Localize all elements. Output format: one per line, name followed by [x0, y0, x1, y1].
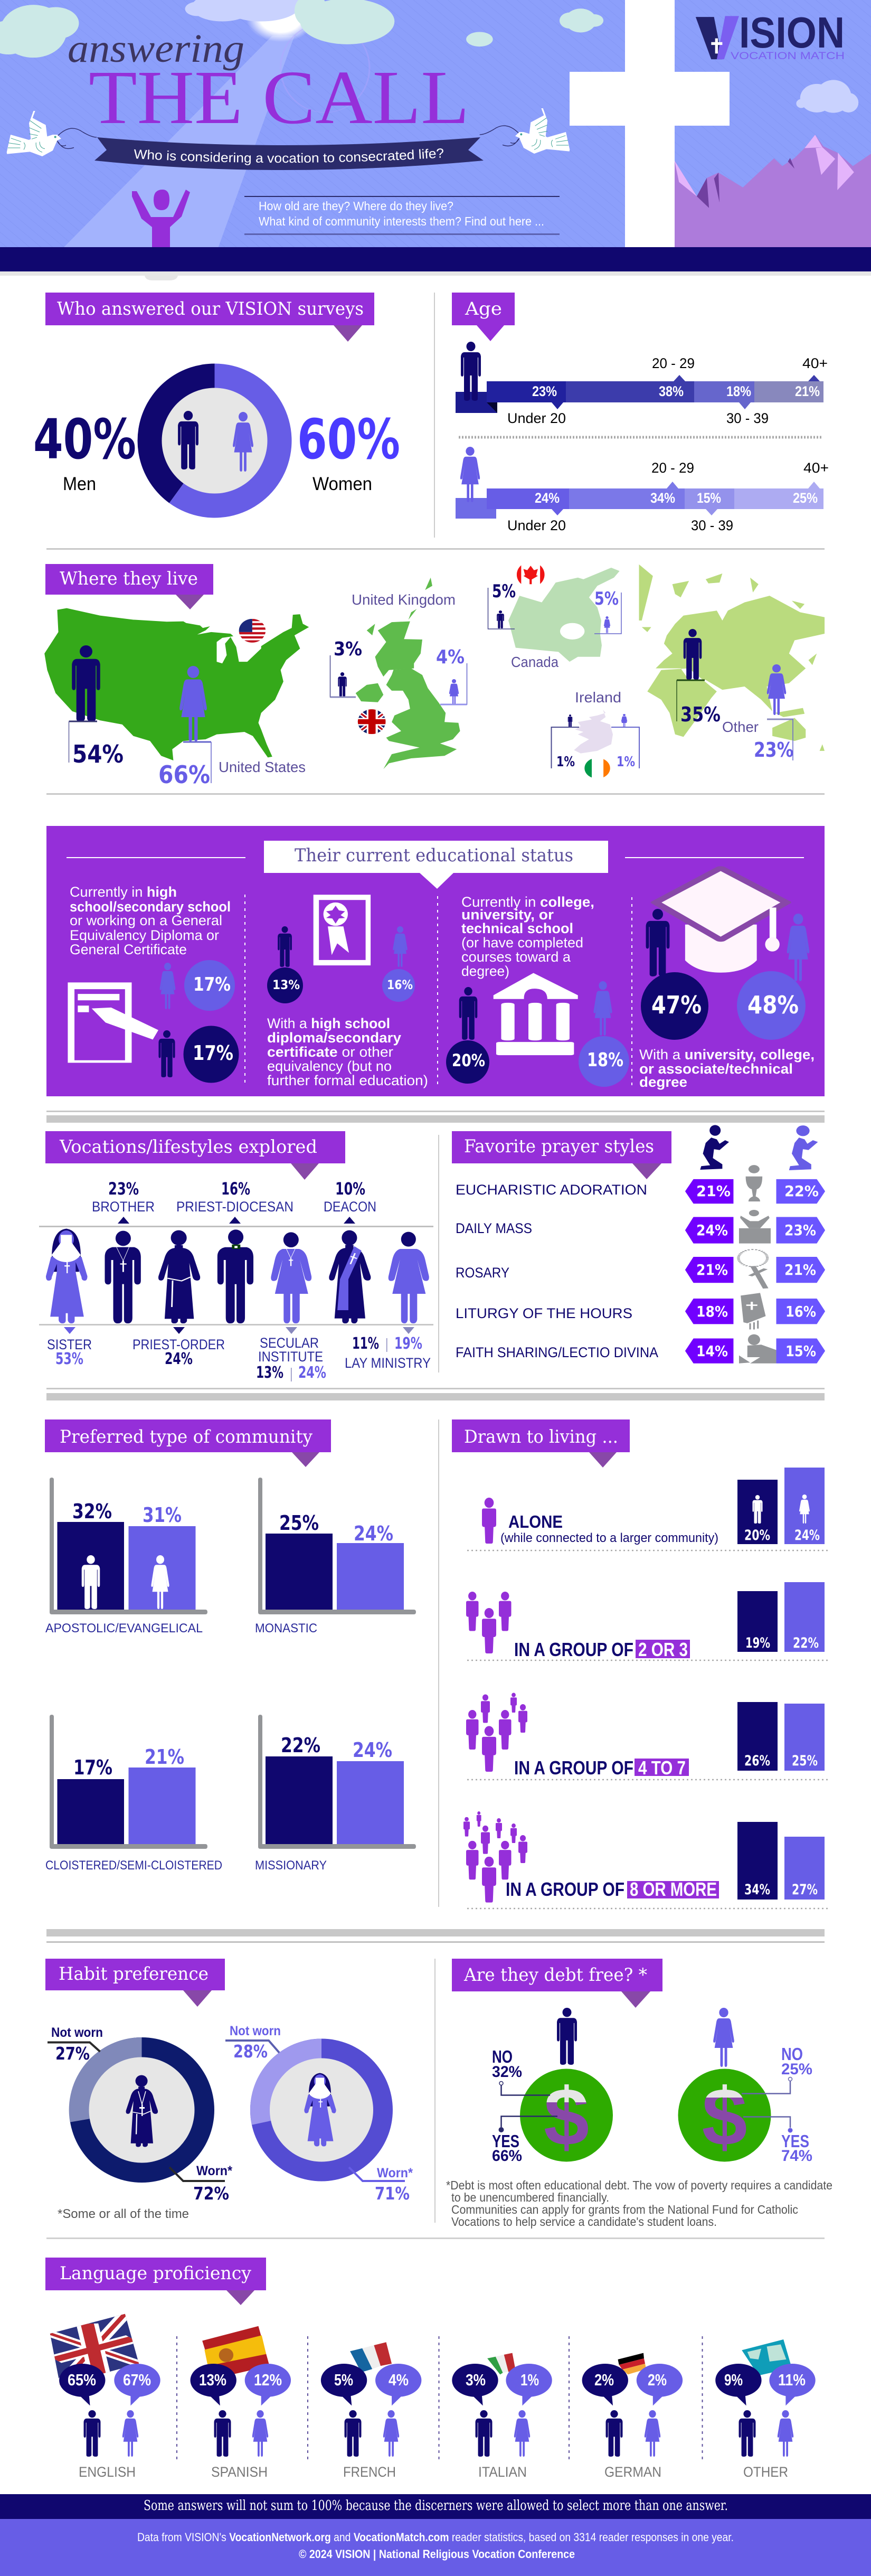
language labels: OTHER — [743, 2464, 788, 2480]
bar chart: apostolic: 31% — [143, 1503, 182, 1527]
logo: VOCATION MATCH — [731, 51, 845, 62]
row: alone — [482, 1468, 825, 1545]
footnote: debt: *Debt is most often educational debt. The vow of poverty requires a candidate — [446, 2178, 832, 2192]
column: diploma: certificate or other — [267, 1044, 393, 1060]
map: rest of world: 23% — [754, 738, 793, 761]
chart: men debt: YES — [492, 2131, 519, 2151]
row: group of 2 or 3: IN A GROUP OF — [514, 1639, 633, 1660]
light beam and sun — [64, 0, 370, 247]
chart: women debt: YES — [781, 2131, 809, 2151]
prayer style table: 18% — [696, 1303, 728, 1320]
heading: debt free: Are they debt free? * — [463, 1964, 647, 1986]
bar chart: apostolic — [45, 1478, 207, 1635]
label: sister, priest-order, secular, lay ministry — [47, 1327, 431, 1382]
heading: debt free — [452, 1959, 662, 2008]
map: United Kingdom: United Kingdom — [352, 591, 456, 608]
language chart: 1% — [520, 2371, 539, 2389]
column: college: courses toward a — [461, 949, 571, 965]
clouds — [0, 0, 858, 113]
bar chart: monastic — [255, 1478, 416, 1635]
label: brother, priest-diocesan, deacon: 23% — [108, 1179, 139, 1199]
label: brother, priest-diocesan, deacon: 16% — [221, 1179, 250, 1199]
column: diploma: equivalency (but no — [267, 1058, 392, 1074]
language chart: 2% — [594, 2371, 614, 2389]
row: group of 8 or more: 8 OR MORE — [630, 1878, 717, 1900]
row: group of 4 to 7: 25% — [792, 1753, 818, 1769]
row: group of 8 or more: 34% — [744, 1882, 770, 1898]
donut chart: men habit: 27% — [55, 2043, 90, 2064]
prayer style table — [456, 1125, 825, 1364]
chart: women debt — [678, 2008, 812, 2165]
map: United States: 66% — [158, 760, 210, 789]
bar chart: missionary: MISSIONARY — [255, 1858, 327, 1873]
heading: who answered: Who answered our VISION surveys — [57, 298, 364, 319]
donut chart: women habit: 71% — [375, 2183, 410, 2204]
label: brother, priest-diocesan, deacon: DEACON — [324, 1199, 376, 1215]
icon: kneeling figures — [700, 1125, 818, 1170]
footer: © 2024 VISION | National Religious Vocation Conference — [299, 2547, 575, 2561]
map: Ireland — [551, 689, 639, 779]
prayer style table: DAILY MASS — [456, 1220, 532, 1236]
donut chart: women habit: 28% — [233, 2041, 268, 2062]
heading: language proficiency: Language proficiency — [60, 2263, 252, 2284]
label: brother, priest-diocesan, deacon — [92, 1179, 376, 1224]
prayer style table: ROSARY — [456, 1265, 509, 1281]
language labels: ENGLISH — [79, 2464, 136, 2480]
row: group of 8 or more — [463, 1811, 825, 1903]
map: rest of world: 35% — [680, 703, 721, 726]
column: high school: 17% — [193, 1041, 233, 1065]
language labels: SPANISH — [211, 2464, 268, 2480]
bar chart: monastic: MONASTIC — [255, 1621, 317, 1635]
column: diploma: 13% — [272, 977, 300, 992]
map: United Kingdom: 4% — [436, 646, 465, 668]
footer — [0, 2494, 871, 2576]
chart: men debt: 66% — [492, 2147, 522, 2165]
label: brother, priest-diocesan, deacon: PRIEST-DIOCESAN — [176, 1199, 294, 1215]
column: college: 18% — [587, 1049, 623, 1071]
footnote: habit: *Some or all of the time — [58, 2207, 189, 2221]
vocation figures row — [39, 1179, 433, 1382]
bar chart: missionary: 22% — [281, 1734, 320, 1757]
language chart: 9% — [724, 2371, 743, 2389]
row: group of 2 or 3 — [466, 1582, 825, 1660]
language chart — [44, 2312, 816, 2480]
prayer style table: FAITH SHARING/LECTIO DIVINA — [456, 1345, 658, 1360]
men age bar — [456, 342, 828, 426]
heading: who answered — [45, 293, 374, 342]
heading: prayer styles: Favorite prayer styles — [464, 1136, 654, 1157]
map: United Kingdom — [330, 578, 467, 769]
bar chart: apostolic: APOSTOLIC/EVANGELICAL — [45, 1621, 203, 1635]
donut chart: men habit — [48, 2025, 232, 2204]
label: sister, priest-order, secular, lay ministry: 53% — [55, 1350, 83, 1368]
heading: age: Age — [465, 298, 502, 319]
column: college — [446, 894, 629, 1087]
column: college: (or have completed — [461, 935, 583, 951]
column: high school: or working on a General — [70, 913, 222, 928]
language chart: 4% — [389, 2371, 409, 2389]
column: high school: General Certificate — [70, 942, 187, 957]
bar chart: apostolic: 32% — [72, 1500, 112, 1523]
map: Canada: 5% — [492, 581, 516, 602]
prayer style table: 16% — [785, 1303, 816, 1320]
prayer style table: LITURGY OF THE HOURS — [456, 1305, 632, 1321]
map: Ireland: Ireland — [575, 689, 621, 706]
donut chart: men habit: Worn* — [196, 2164, 232, 2178]
women age bar: 15% — [697, 490, 721, 506]
icons: chalice, pulpit, rosary, book, reader — [739, 1165, 776, 1364]
label: brother, priest-diocesan, deacon: 10% — [335, 1179, 365, 1199]
men age bar: 40+ — [802, 355, 828, 371]
logo: ISION — [739, 8, 845, 57]
heading: where they live — [45, 564, 213, 609]
banner ribbon — [94, 137, 484, 170]
language chart: 11% — [778, 2371, 806, 2389]
women age bar: 40+ — [803, 460, 829, 476]
language chart: 2% — [648, 2371, 667, 2389]
people icons — [84, 2410, 793, 2457]
column: high school: Currently in high — [70, 884, 177, 900]
column: diploma: diploma/secondary — [267, 1030, 401, 1046]
map: United States: 54% — [72, 740, 124, 768]
percent hexagons — [685, 1179, 733, 1364]
gender donut chart — [33, 363, 400, 518]
intro text: What kind of community interests them? Find out here ... — [259, 214, 544, 228]
prayer style table: 21% — [696, 1182, 731, 1200]
row: group of 4 to 7: 26% — [744, 1753, 770, 1769]
row: group of 4 to 7: 4 TO 7 — [638, 1757, 686, 1779]
footnote: debt: Vocations to help service a candidate's student loans. — [451, 2215, 717, 2229]
men age bar: 30 - 39 — [726, 410, 769, 426]
banner ribbon: Who is considering a vocation to consecrated life? — [134, 148, 443, 165]
column: college: 20% — [452, 1050, 485, 1070]
column: university — [639, 868, 815, 1090]
heading: vocations: Vocations/lifestyles explored — [59, 1136, 317, 1158]
column: high school — [68, 884, 239, 1083]
map: United States: United States — [219, 759, 306, 775]
bar chart: cloistered: CLOISTERED/SEMI-CLOISTERED — [45, 1858, 222, 1873]
row: group of 4 to 7 — [466, 1693, 825, 1779]
column: college: Currently in college, — [461, 894, 594, 910]
column: college: university, or — [461, 907, 554, 923]
donut chart: men habit: Not worn — [51, 2025, 103, 2040]
footnote: debt: to be unencumbered financially. — [451, 2190, 609, 2204]
heading: where they live: Where they live — [60, 568, 198, 589]
men age bar: 38% — [659, 383, 684, 399]
intro text: How old are they? Where do they live? — [259, 199, 453, 213]
bar chart: cloistered — [45, 1715, 222, 1873]
prayer style table: 15% — [785, 1342, 816, 1360]
column: university: 48% — [747, 991, 799, 1019]
icon: right dove — [480, 108, 570, 154]
label: sister, priest-order, secular, lay ministry: INSTITUTE — [258, 1349, 323, 1365]
language chart: 13% — [199, 2371, 226, 2389]
map: Canada — [488, 562, 621, 670]
bar chart: cloistered: 21% — [145, 1745, 184, 1769]
label: sister, priest-order, secular, lay ministry: 24% — [298, 1364, 326, 1382]
column: university: 47% — [651, 991, 702, 1019]
label: brother, priest-diocesan, deacon: BROTHER — [92, 1199, 155, 1215]
gender donut chart: Women — [313, 474, 372, 494]
language labels — [79, 2464, 788, 2480]
donut chart: women habit: Not worn — [230, 2024, 281, 2038]
heading: educational status — [264, 841, 608, 889]
row: group of 2 or 3: 19% — [745, 1635, 770, 1651]
bar chart: missionary: 24% — [353, 1738, 392, 1762]
map: United Kingdom: 3% — [334, 638, 362, 660]
mountains — [675, 135, 871, 247]
chart: men debt: 32% — [492, 2063, 522, 2081]
gender donut chart: 60% — [297, 407, 400, 472]
label: sister, priest-order, secular, lay ministry: SECULAR — [260, 1335, 319, 1351]
heading: drawn to living: Drawn to living ... — [464, 1426, 618, 1447]
prayer style table: 24% — [696, 1221, 728, 1239]
row: alone: ALONE — [508, 1512, 563, 1531]
prayer style table: 23% — [784, 1221, 816, 1239]
gender donut chart: 40% — [33, 407, 136, 472]
donut chart: men habit: 72% — [193, 2183, 229, 2204]
heading: preferred community: Preferred type of community — [60, 1426, 313, 1447]
column: university: With a university, college, — [639, 1047, 815, 1063]
language labels: ITALIAN — [478, 2464, 527, 2480]
prayer style table: 21% — [784, 1261, 816, 1278]
chart: women debt: $ — [702, 2071, 747, 2163]
column: high school: school/secondary school — [70, 899, 231, 915]
bar chart: cloistered: 17% — [73, 1756, 112, 1779]
women age bar — [456, 447, 829, 533]
row: alone: 24% — [794, 1527, 820, 1544]
language chart: 67% — [123, 2371, 151, 2389]
prayer style table: EUCHARISTIC ADORATION — [456, 1182, 647, 1198]
donut chart: women habit — [225, 2024, 413, 2204]
bar chart: monastic: 24% — [354, 1522, 393, 1545]
logo — [696, 8, 845, 62]
map: Canada: Canada — [511, 654, 558, 670]
column: university: degree — [639, 1074, 687, 1090]
heading: prayer styles — [452, 1131, 671, 1179]
language chart: 65% — [68, 2371, 96, 2389]
chart: women debt: 25% — [781, 2061, 812, 2078]
column: diploma: further formal education) — [267, 1073, 428, 1088]
language chart: 12% — [254, 2371, 282, 2389]
footer: Data from VISION's VocationNetwork.org and VocationMatch.com reader statistics, based on 3314 reader responses in one year. — [137, 2531, 734, 2544]
women age bar: 20 - 29 — [651, 460, 694, 476]
heading: age — [452, 293, 515, 341]
panel: title banner — [0, 0, 871, 280]
label: sister, priest-order, secular, lay ministry: PRIEST-ORDER — [132, 1337, 225, 1352]
heading: vocations — [45, 1131, 345, 1180]
prayer style table: 14% — [696, 1342, 728, 1360]
row: group of 8 or more: IN A GROUP OF — [506, 1878, 624, 1900]
map: Ireland: 1% — [617, 754, 635, 770]
label: sister, priest-order, secular, lay ministry: 19% — [394, 1334, 422, 1353]
column: diploma — [267, 895, 428, 1088]
intro text — [244, 196, 560, 235]
row: group of 4 to 7: IN A GROUP OF — [514, 1757, 633, 1779]
column: college: degree) — [461, 963, 509, 979]
column: college: technical school — [461, 920, 573, 936]
heading: habit preference — [45, 1959, 225, 2007]
bar chart: missionary — [255, 1715, 416, 1873]
row: alone: (while connected to a larger community) — [500, 1531, 718, 1545]
gender donut chart: Men — [63, 474, 96, 494]
map: United States — [44, 608, 309, 789]
men age bar: 18% — [726, 383, 751, 399]
map: rest of world: Other — [722, 719, 759, 735]
men age bar: 20 - 29 — [652, 355, 695, 371]
language labels: FRENCH — [343, 2464, 396, 2480]
women age bar: 24% — [535, 490, 560, 506]
label: sister, priest-order, secular, lay ministry: 13% — [256, 1364, 283, 1382]
heading: drawn to living — [452, 1419, 630, 1468]
label: sister, priest-order, secular, lay ministry: LAY MINISTRY — [345, 1355, 431, 1371]
chart: men debt: NO — [492, 2047, 513, 2066]
chart: women debt: 74% — [781, 2147, 812, 2165]
column: high school: Equivalency Diploma or — [70, 927, 219, 943]
panel: educational status — [46, 826, 825, 1096]
language chart: 5% — [334, 2371, 353, 2389]
title: the call: THE CALL — [89, 55, 469, 140]
row: group of 2 or 3: 2 OR 3 — [638, 1639, 688, 1660]
women age bar: Under 20 — [507, 518, 566, 533]
speech bubbles — [59, 2364, 762, 2405]
bar chart: monastic: 25% — [279, 1511, 319, 1535]
row: group of 8 or more: 27% — [792, 1882, 818, 1898]
men age bar: 23% — [532, 383, 557, 399]
row: alone: 20% — [744, 1527, 770, 1544]
white cross — [570, 0, 730, 247]
map: Ireland: 1% — [556, 754, 575, 770]
label: sister, priest-order, secular, lay ministry: 11% — [352, 1334, 379, 1353]
column: diploma: With a high school — [267, 1016, 390, 1031]
heading: habit preference: Habit preference — [59, 1963, 209, 1985]
column: diploma: 16% — [387, 977, 413, 992]
prayer style table: 21% — [696, 1261, 728, 1278]
icon: flags — [44, 2312, 792, 2387]
footnote: debt: Communities can apply for grants from the National Fund for Catholic — [451, 2203, 798, 2216]
label: sister, priest-order, secular, lay ministry: 24% — [165, 1350, 193, 1368]
language chart: 3% — [466, 2371, 486, 2389]
chart: men debt: $ — [544, 2071, 589, 2163]
row: group of 2 or 3: 22% — [793, 1635, 819, 1651]
men age bar: Under 20 — [507, 410, 566, 426]
heading: preferred community — [45, 1419, 331, 1467]
language labels: GERMAN — [604, 2464, 661, 2480]
map: rest of world — [639, 565, 825, 761]
map: Canada: 5% — [594, 588, 619, 609]
women age bar: 25% — [793, 490, 818, 506]
donut chart: women habit: Worn* — [377, 2166, 413, 2180]
title: answering: answering — [68, 26, 244, 71]
column: university: or associate/technical — [639, 1061, 793, 1077]
icon: left dove — [7, 111, 97, 156]
men age bar: 21% — [795, 383, 820, 399]
prayer style table: 22% — [784, 1182, 819, 1200]
chart: men debt — [492, 2008, 613, 2165]
footer: Some answers will not sum to 100% because the discerners were allowed to select more than one answer. — [144, 2498, 728, 2514]
women age bar: 30 - 39 — [691, 518, 733, 533]
chart: women debt: NO — [781, 2044, 803, 2064]
label: sister, priest-order, secular, lay ministry: SISTER — [47, 1337, 92, 1352]
column: high school: 17% — [193, 974, 231, 995]
footnote: debt — [446, 2178, 832, 2229]
women age bar: 34% — [650, 490, 675, 506]
heading: educational status: Their current educational status — [295, 845, 573, 866]
heading: language proficiency — [45, 2258, 266, 2305]
icon: figure with raised arms — [132, 190, 190, 247]
